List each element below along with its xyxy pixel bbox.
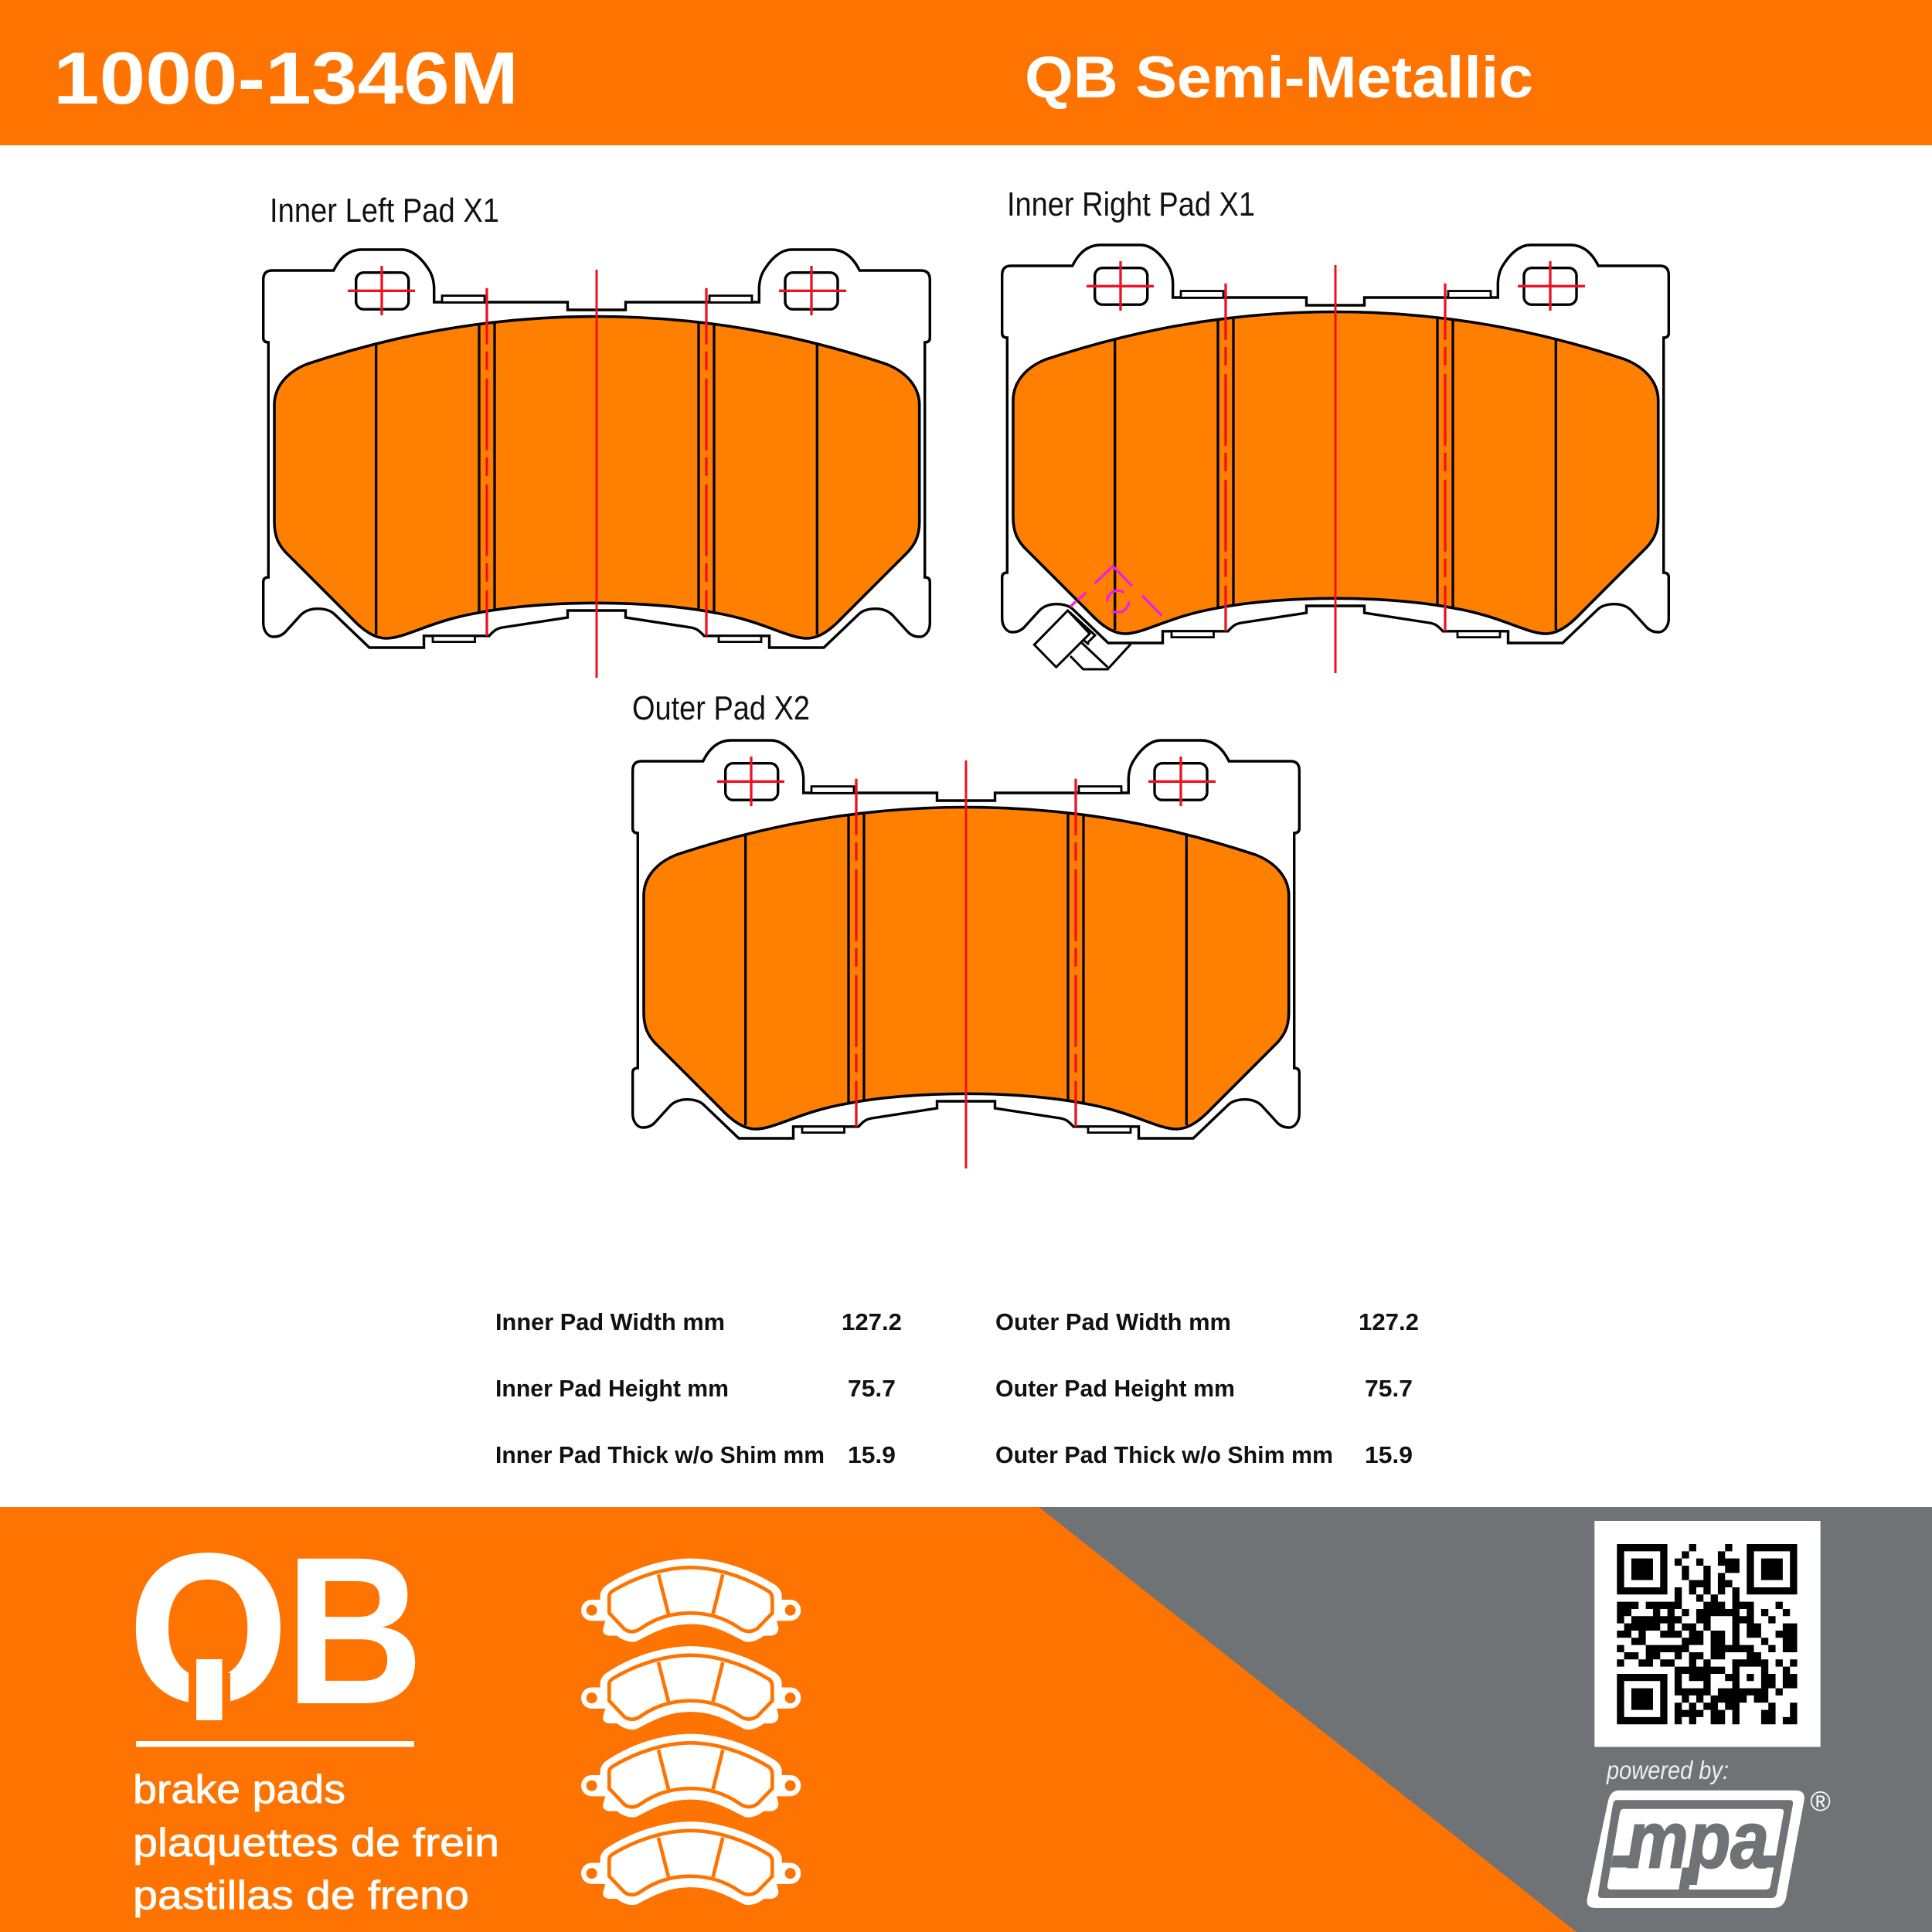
product names in three languages: brake pads: [133, 1767, 345, 1812]
specifications table: 127.2: [1359, 1308, 1419, 1335]
specifications table: 127.2: [842, 1308, 902, 1335]
product names in three languages: [133, 1767, 499, 1918]
wear sensor: [1034, 611, 1131, 669]
label: outer pad: Outer Pad X2: [632, 689, 810, 727]
specifications table: 75.7: [1365, 1375, 1413, 1402]
product names in three languages: plaquettes de frein: [133, 1821, 499, 1866]
logo rule: [136, 1741, 414, 1747]
specifications table: Outer Pad Thick w/o Shim mm: [995, 1441, 1333, 1468]
QR code: [1594, 1521, 1821, 1747]
header band: [0, 0, 1932, 145]
diagram: inner right pad with wear sensor: [1002, 245, 1668, 673]
powered by caption: powered by:: [1606, 1756, 1729, 1784]
specifications table: Inner Pad Height mm: [495, 1375, 729, 1402]
specifications table: 15.9: [848, 1441, 896, 1468]
registered mark: ®: [1810, 1785, 1831, 1817]
specifications table: Inner Pad Width mm: [495, 1308, 725, 1335]
QB logo: [129, 1511, 423, 1748]
label: inner right pad: Inner Right Pad X1: [1007, 185, 1255, 223]
mpa logo: [1587, 1791, 1804, 1908]
product line title: QB Semi-Metallic: [1025, 45, 1533, 111]
footer band: [0, 1507, 1932, 1932]
specifications table: [495, 1308, 1419, 1468]
specifications table: Outer Pad Height mm: [995, 1375, 1235, 1402]
specifications table: 15.9: [1365, 1441, 1413, 1468]
icon: stack of brake pads: [581, 1559, 801, 1905]
part number: 1000-1346M: [53, 37, 519, 120]
diagram: outer pad: [633, 740, 1299, 1168]
mpa logo: mpa: [1627, 1796, 1769, 1886]
footer grey diagonal panel: [1039, 1507, 1932, 1932]
wear sensor marker: [1070, 566, 1162, 616]
diagram: inner left pad: [264, 250, 930, 678]
specifications table: 75.7: [848, 1375, 896, 1402]
QB logo: B: [284, 1513, 423, 1748]
product names in three languages: pastillas de freno: [133, 1873, 469, 1918]
QB logo: Q: [129, 1511, 287, 1746]
label: inner left pad: Inner Left Pad X1: [270, 192, 499, 230]
specifications table: Inner Pad Thick w/o Shim mm: [495, 1441, 825, 1468]
specifications table: Outer Pad Width mm: [995, 1308, 1231, 1335]
